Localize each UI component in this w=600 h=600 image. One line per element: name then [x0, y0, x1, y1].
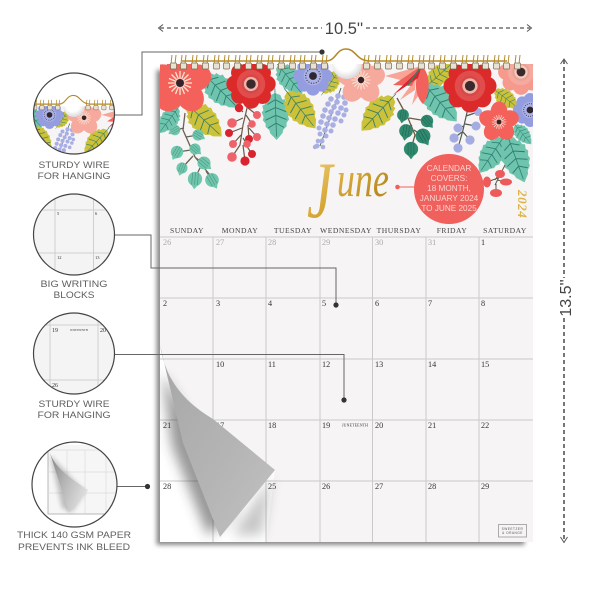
callout: calendar covers: COVERS:	[431, 174, 467, 183]
label: thick paper: THICK 140 GSM PAPER	[17, 530, 131, 541]
date numbers: 18	[268, 421, 276, 430]
date numbers: 22	[481, 421, 489, 430]
callout: calendar covers: 18 MONTH,	[427, 184, 471, 193]
date numbers: 6	[375, 299, 379, 308]
weekday headers: SATURDAY	[483, 226, 527, 235]
June script title: J	[307, 147, 333, 235]
date numbers: 15	[481, 360, 489, 369]
date numbers: 11	[268, 360, 276, 369]
page curl	[160, 345, 275, 537]
date numbers: 2	[163, 299, 167, 308]
page shadow	[156, 70, 524, 545]
date numbers: 20	[375, 421, 383, 430]
top width dimension	[158, 20, 532, 38]
calendar grid	[160, 237, 533, 542]
date numbers: 26	[163, 238, 171, 247]
date numbers: 21	[428, 421, 436, 430]
circle: juneteenth detail: JUNETEENTH	[70, 329, 88, 332]
label: sturdy wire	[38, 160, 110, 182]
label: sturdy wire: STURDY WIRE	[38, 160, 110, 171]
date numbers: 19	[322, 421, 330, 430]
date numbers: 4	[268, 299, 272, 308]
floral border with spiral wire and hanging hole	[145, 40, 547, 197]
date numbers: 30	[375, 238, 383, 247]
label: big writing blocks	[40, 279, 108, 301]
leader: wire callout	[114, 49, 325, 115]
leader: writing blocks callout	[114, 235, 339, 308]
label: big writing blocks: BLOCKS	[54, 290, 94, 301]
circle: juneteenth detail: 19	[52, 328, 58, 334]
date numbers: 28	[428, 482, 436, 491]
date numbers: 31	[428, 238, 436, 247]
callout: calendar covers	[395, 154, 484, 224]
label: sturdy wire second	[38, 399, 110, 421]
date numbers: 29	[481, 482, 489, 491]
calendar page	[160, 64, 533, 542]
date numbers: 13	[375, 360, 383, 369]
weekday headers: TUESDAY	[274, 226, 312, 235]
date numbers: 1	[481, 238, 485, 247]
date numbers: 27	[216, 238, 224, 247]
date numbers: 3	[216, 299, 220, 308]
date numbers: 12	[322, 360, 330, 369]
weekday headers: THURSDAY	[377, 226, 421, 235]
date numbers: 17	[216, 421, 224, 430]
date numbers: 21	[163, 421, 171, 430]
date numbers: 10	[216, 360, 224, 369]
leader: juneteenth callout	[114, 354, 347, 403]
weekday headers: WEDNESDAY	[320, 226, 372, 235]
date numbers: 27	[375, 482, 383, 491]
weekday headers: SUNDAY	[170, 226, 204, 235]
label: sturdy wire second: FOR HANGING	[38, 410, 110, 421]
label: sturdy wire second: STURDY WIRE	[38, 399, 110, 410]
circle: hanging wire detail	[32, 72, 116, 155]
date numbers: 8	[481, 299, 485, 308]
circle: writing blocks detail	[32, 193, 116, 276]
date numbers: 7	[428, 299, 432, 308]
label: thick paper	[17, 530, 131, 553]
weekday headers: MONDAY	[222, 226, 258, 235]
date numbers: JUNETEENTH	[342, 424, 368, 428]
date numbers: 28	[163, 482, 171, 491]
date numbers: 26	[322, 482, 330, 491]
brand logo	[498, 524, 526, 537]
date numbers: 14	[428, 360, 436, 369]
circle: paper curl detail	[32, 442, 120, 527]
weekday headers	[170, 226, 527, 235]
label: big writing blocks: BIG WRITING	[40, 279, 108, 290]
circle: writing blocks detail: 13	[95, 255, 100, 260]
brand logo: SWEETZER	[502, 527, 524, 531]
circle: juneteenth detail	[32, 312, 116, 395]
top width dimension: 10.5''	[325, 20, 363, 38]
circle: juneteenth detail: 20	[100, 328, 106, 334]
circle: writing blocks detail: 12	[57, 255, 62, 260]
circle: juneteenth detail: 26	[52, 383, 58, 389]
date numbers: 29	[322, 238, 330, 247]
label: sturdy wire: FOR HANGING	[38, 171, 110, 182]
circle: writing blocks detail: 6	[95, 211, 98, 216]
year 2024: 2024	[515, 189, 530, 218]
date numbers: 28	[268, 238, 276, 247]
right height dimension	[558, 59, 575, 542]
brand logo: & ORANGE	[502, 531, 523, 535]
label: thick paper: PREVENTS INK BLEED	[18, 542, 130, 553]
right height dimension: 13.5''	[558, 279, 575, 317]
weekday headers: FRIDAY	[437, 226, 467, 235]
circle: writing blocks detail: 5	[57, 211, 60, 216]
callout: calendar covers: CALENDAR	[427, 164, 471, 173]
date numbers	[163, 238, 489, 491]
leader: paper callout	[117, 484, 150, 489]
callout: calendar covers: TO JUNE 2025	[421, 204, 477, 213]
date numbers: 25	[268, 482, 276, 491]
callout: calendar covers: JANUARY 2024	[420, 194, 479, 203]
date numbers: 5	[322, 299, 326, 308]
June script title: une	[337, 152, 389, 207]
